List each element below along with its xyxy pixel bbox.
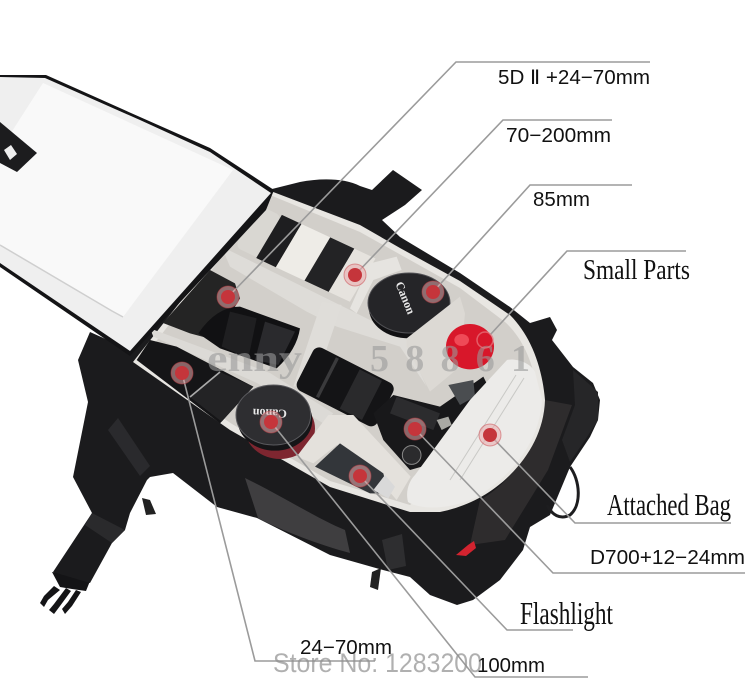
callout: 5D II +24-70mm: 5D Ⅱ +24−70mm [498, 67, 650, 89]
attached bag [407, 360, 542, 507]
padded corner behind cap [407, 297, 465, 392]
callout: Small Parts: Small Parts [583, 255, 690, 286]
store watermark: Store No: 1283200 [273, 648, 482, 678]
compartment floor [140, 195, 538, 505]
watermark digits: 58861 [370, 338, 530, 380]
callout: 70-200mm [344, 120, 612, 286]
small parts red ball [446, 324, 494, 369]
lower-left lens [137, 340, 253, 423]
right lens [294, 345, 396, 429]
flash [315, 443, 388, 493]
callout: D700+12-24mm [404, 418, 745, 573]
100mm lens with Canon cap: Canon [252, 406, 287, 421]
callout: 85mm: 85mm [533, 189, 590, 211]
lower left divider [150, 328, 333, 423]
upper telephoto lens [235, 203, 376, 304]
backpack body with strap [53, 170, 600, 605]
watermark: enny [207, 338, 302, 380]
padded rim [133, 190, 545, 512]
interior contents [137, 203, 494, 500]
callout: Attached Bag [479, 424, 731, 523]
callout: 24-70mm [171, 362, 392, 661]
short padded divider beside cap [350, 257, 402, 313]
left buckle [40, 572, 92, 614]
lower padded divider pads [297, 415, 411, 500]
100mm lens with Canon cap [236, 385, 315, 459]
callout: Flashlight: Flashlight [520, 595, 613, 631]
D700 camera body [373, 377, 488, 470]
callout: Flashlight [349, 465, 613, 631]
callout: D700+12-24mm: D700+12−24mm [590, 547, 745, 569]
callout: 85mm [422, 185, 632, 303]
callout: Small Parts [477, 251, 690, 348]
left camera body and wide lens [163, 270, 300, 368]
85mm lens with Canon cap: Canon [393, 279, 418, 317]
callout: 100mm [260, 411, 588, 677]
callout: 24-70mm: 24−70mm [300, 637, 392, 659]
body details: side panels, mesh, red tab, clips, carry loop [85, 370, 598, 590]
lid tag [0, 122, 37, 172]
callout: 70-200mm: 70−200mm [506, 125, 611, 147]
bag lid [0, 75, 274, 356]
vertical center strap divider [293, 302, 342, 387]
85mm lens with Canon cap [368, 273, 450, 338]
callout: 100mm: 100mm [477, 655, 545, 677]
callout: 5D II +24-70mm [217, 62, 650, 308]
long upper divider [222, 247, 427, 387]
